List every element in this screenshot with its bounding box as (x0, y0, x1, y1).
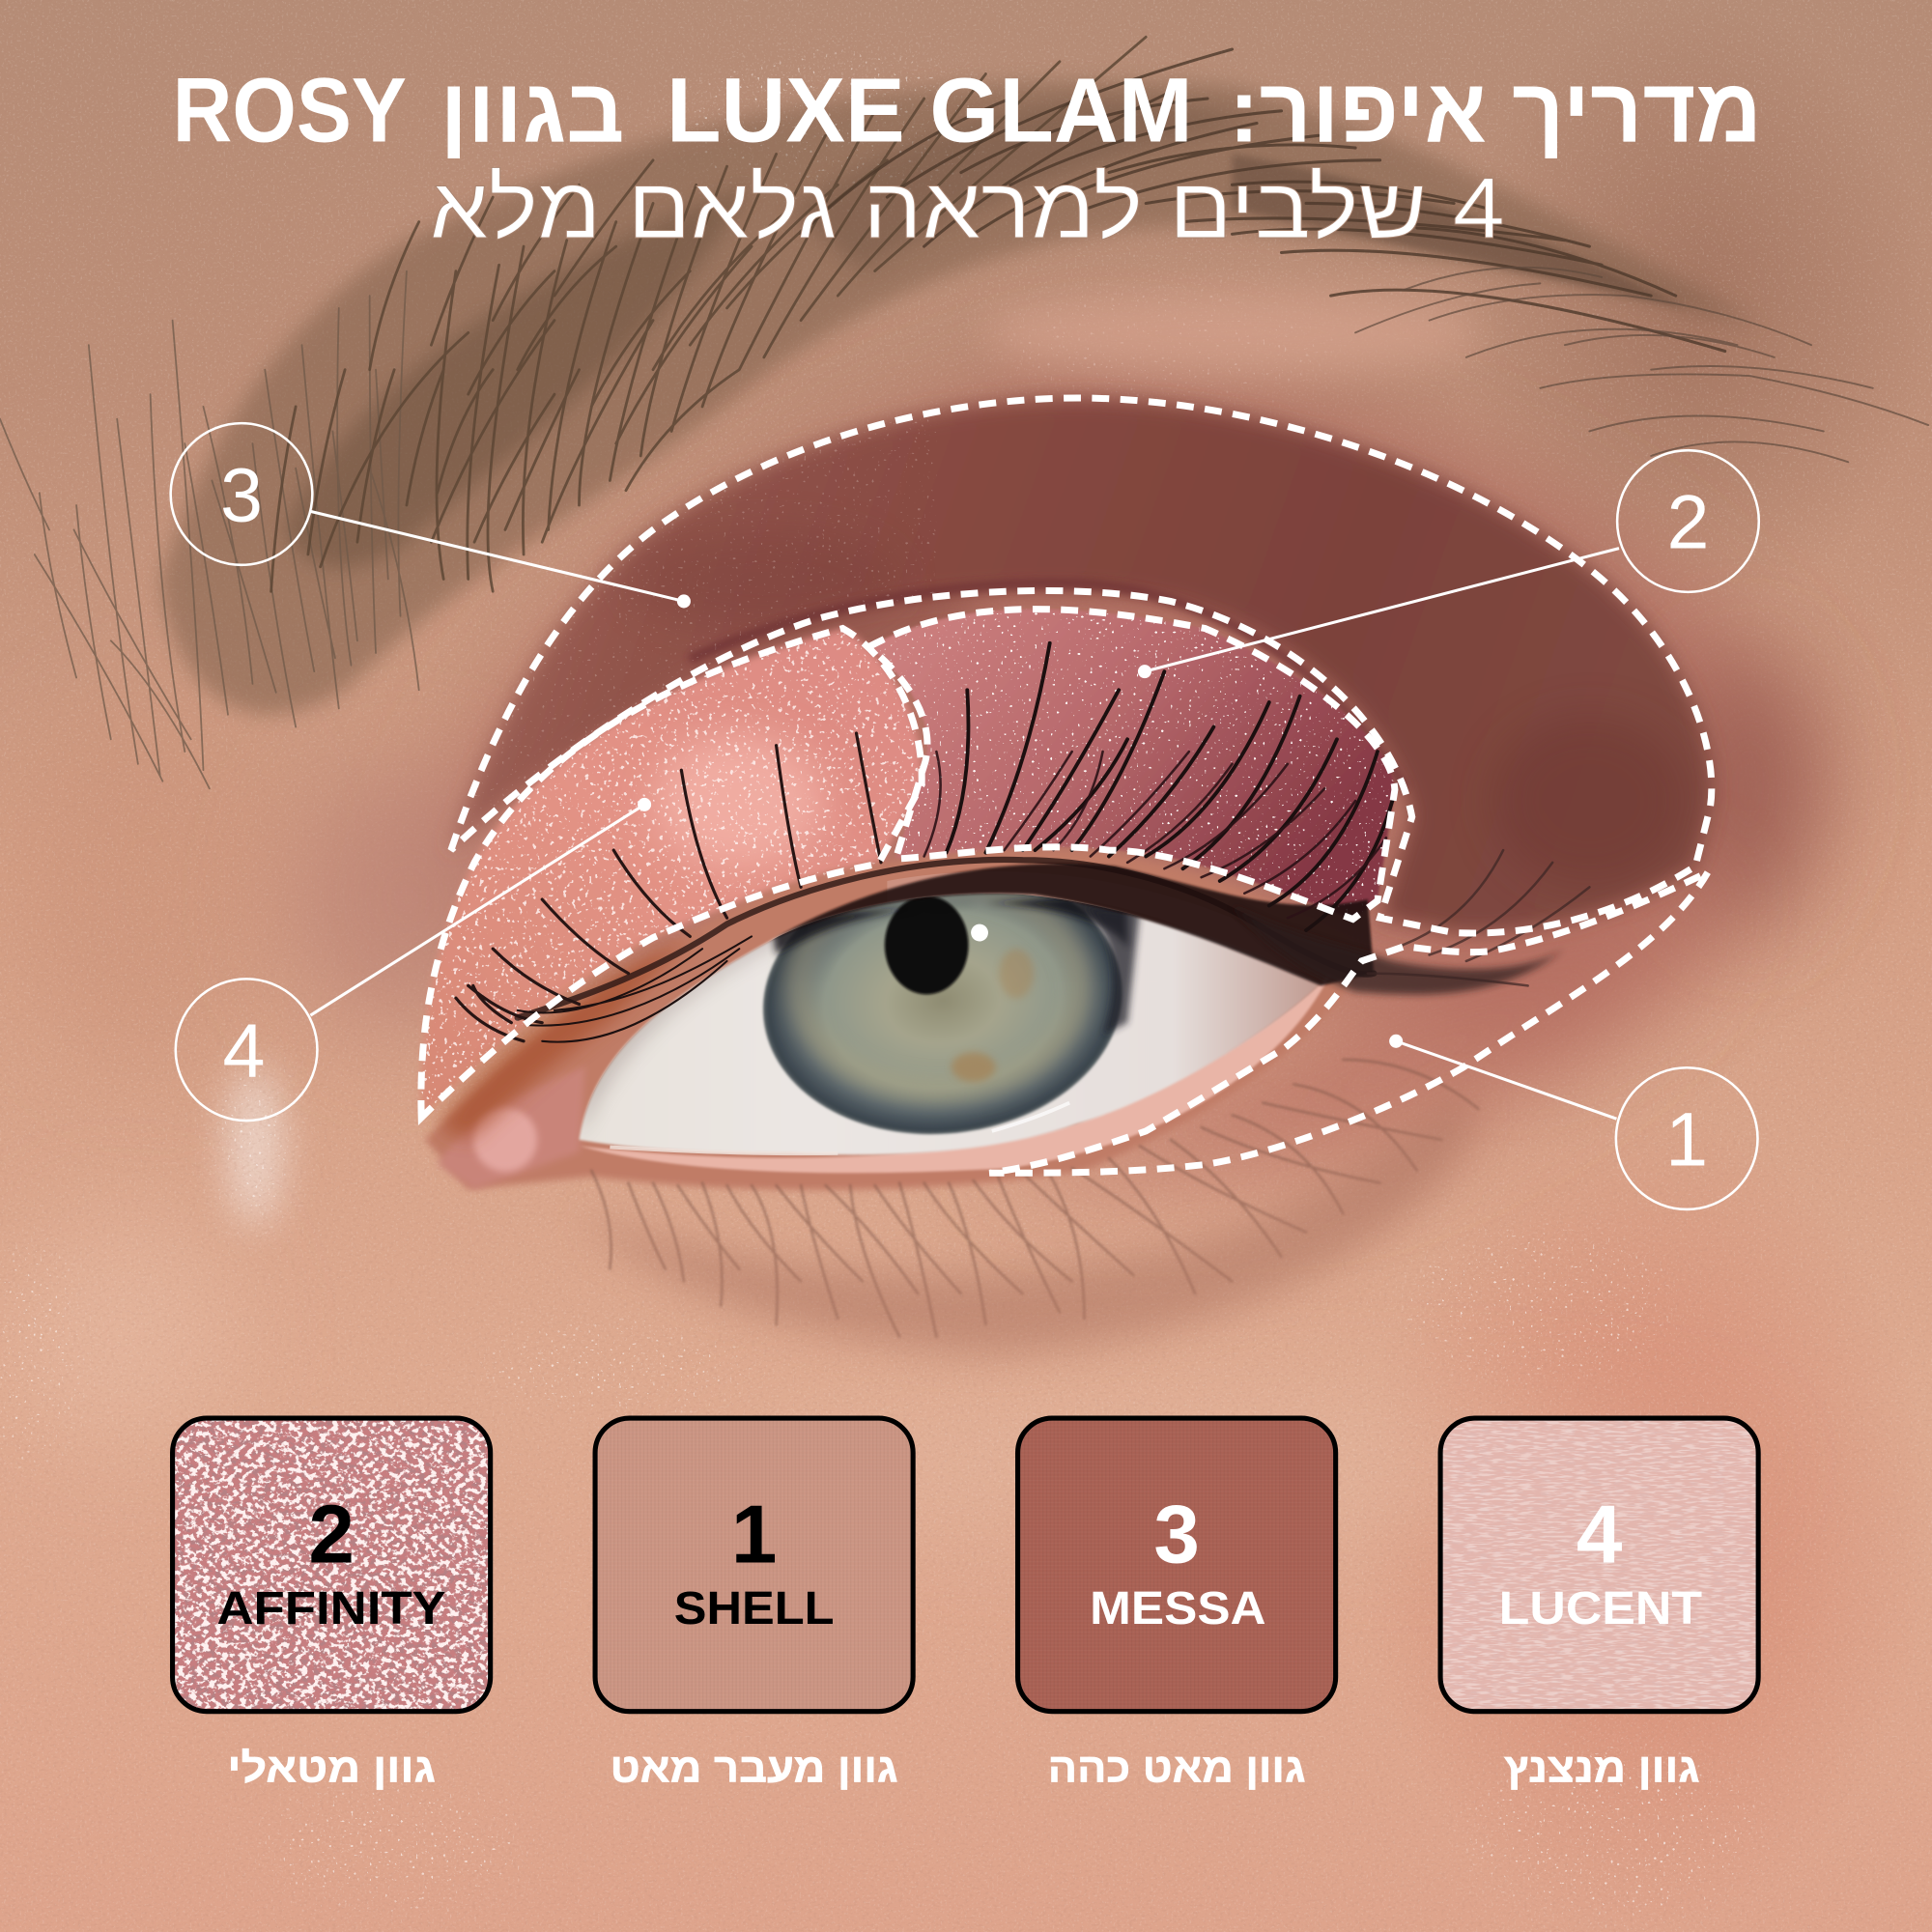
dashed zone 1 (989, 872, 1708, 1173)
swatch: Affinity (173, 1418, 491, 1712)
glitter specks on matte shadow (460, 416, 937, 839)
liner and lashes (456, 643, 1589, 1042)
callout 4: 4 (223, 1008, 266, 1094)
callout 2 (1138, 450, 1759, 678)
title: מדריך איפור: (1229, 61, 1762, 162)
dashed zone 2 (868, 610, 1395, 920)
title: LUXE GLAM (667, 61, 1193, 162)
pupil (885, 895, 969, 994)
swatch: Affinity: 2 (308, 1489, 355, 1580)
callout 3 (171, 423, 691, 608)
swatch: Messa: MESSA (1090, 1582, 1266, 1634)
caption: metallic: גוון מטאלי (227, 1746, 436, 1791)
eyeball (578, 893, 1320, 1156)
swatch: Lucent: LUCENT (1499, 1582, 1703, 1634)
brow mass (160, 81, 1762, 715)
dashed zone 3 (451, 398, 1712, 933)
callout 3: 3 (220, 452, 263, 538)
caption: shimmer: גוון מנצנץ (1504, 1746, 1699, 1791)
title: ROSY (173, 61, 407, 162)
swatch: Lucent: 4 (1577, 1489, 1623, 1580)
brow hairs (0, 37, 1928, 788)
swatch: Messa (1018, 1418, 1336, 1712)
lid and tear duct skin (425, 850, 1368, 1190)
swatch: Messa: 3 (1153, 1489, 1200, 1580)
dashed zones (421, 398, 1712, 1173)
zone 4 shimmer (419, 625, 923, 1109)
zone 2 metallic (873, 609, 1395, 914)
swatch: Shell (595, 1418, 913, 1712)
swatch: Shell: 1 (731, 1489, 777, 1580)
zone 3 matte shadow (451, 398, 1712, 933)
callout 2: 2 (1666, 479, 1709, 565)
subtitle: 4 שלבים למראה גלאם מלא (430, 160, 1505, 256)
dashed zone 4 (421, 629, 922, 1118)
under-eye shadow (579, 1084, 1473, 1355)
callout 1: 1 (1665, 1096, 1708, 1182)
callout 4 (176, 798, 651, 1121)
lower lashes (591, 1060, 1479, 1337)
eyeshadow blend glow (283, 290, 1815, 1182)
caption: transition matte: גוון מעבר מאט (611, 1746, 898, 1791)
title (173, 61, 1762, 162)
swatch: Shell: SHELL (674, 1582, 835, 1634)
swatch: Lucent (1440, 1418, 1758, 1712)
callout 1 (1389, 1035, 1758, 1209)
swatch: Affinity: AFFINITY (216, 1582, 446, 1634)
iris (750, 849, 1135, 1151)
title: בגוון (440, 61, 625, 162)
caption: dark matte: גוון מאט כהה (1048, 1747, 1305, 1791)
